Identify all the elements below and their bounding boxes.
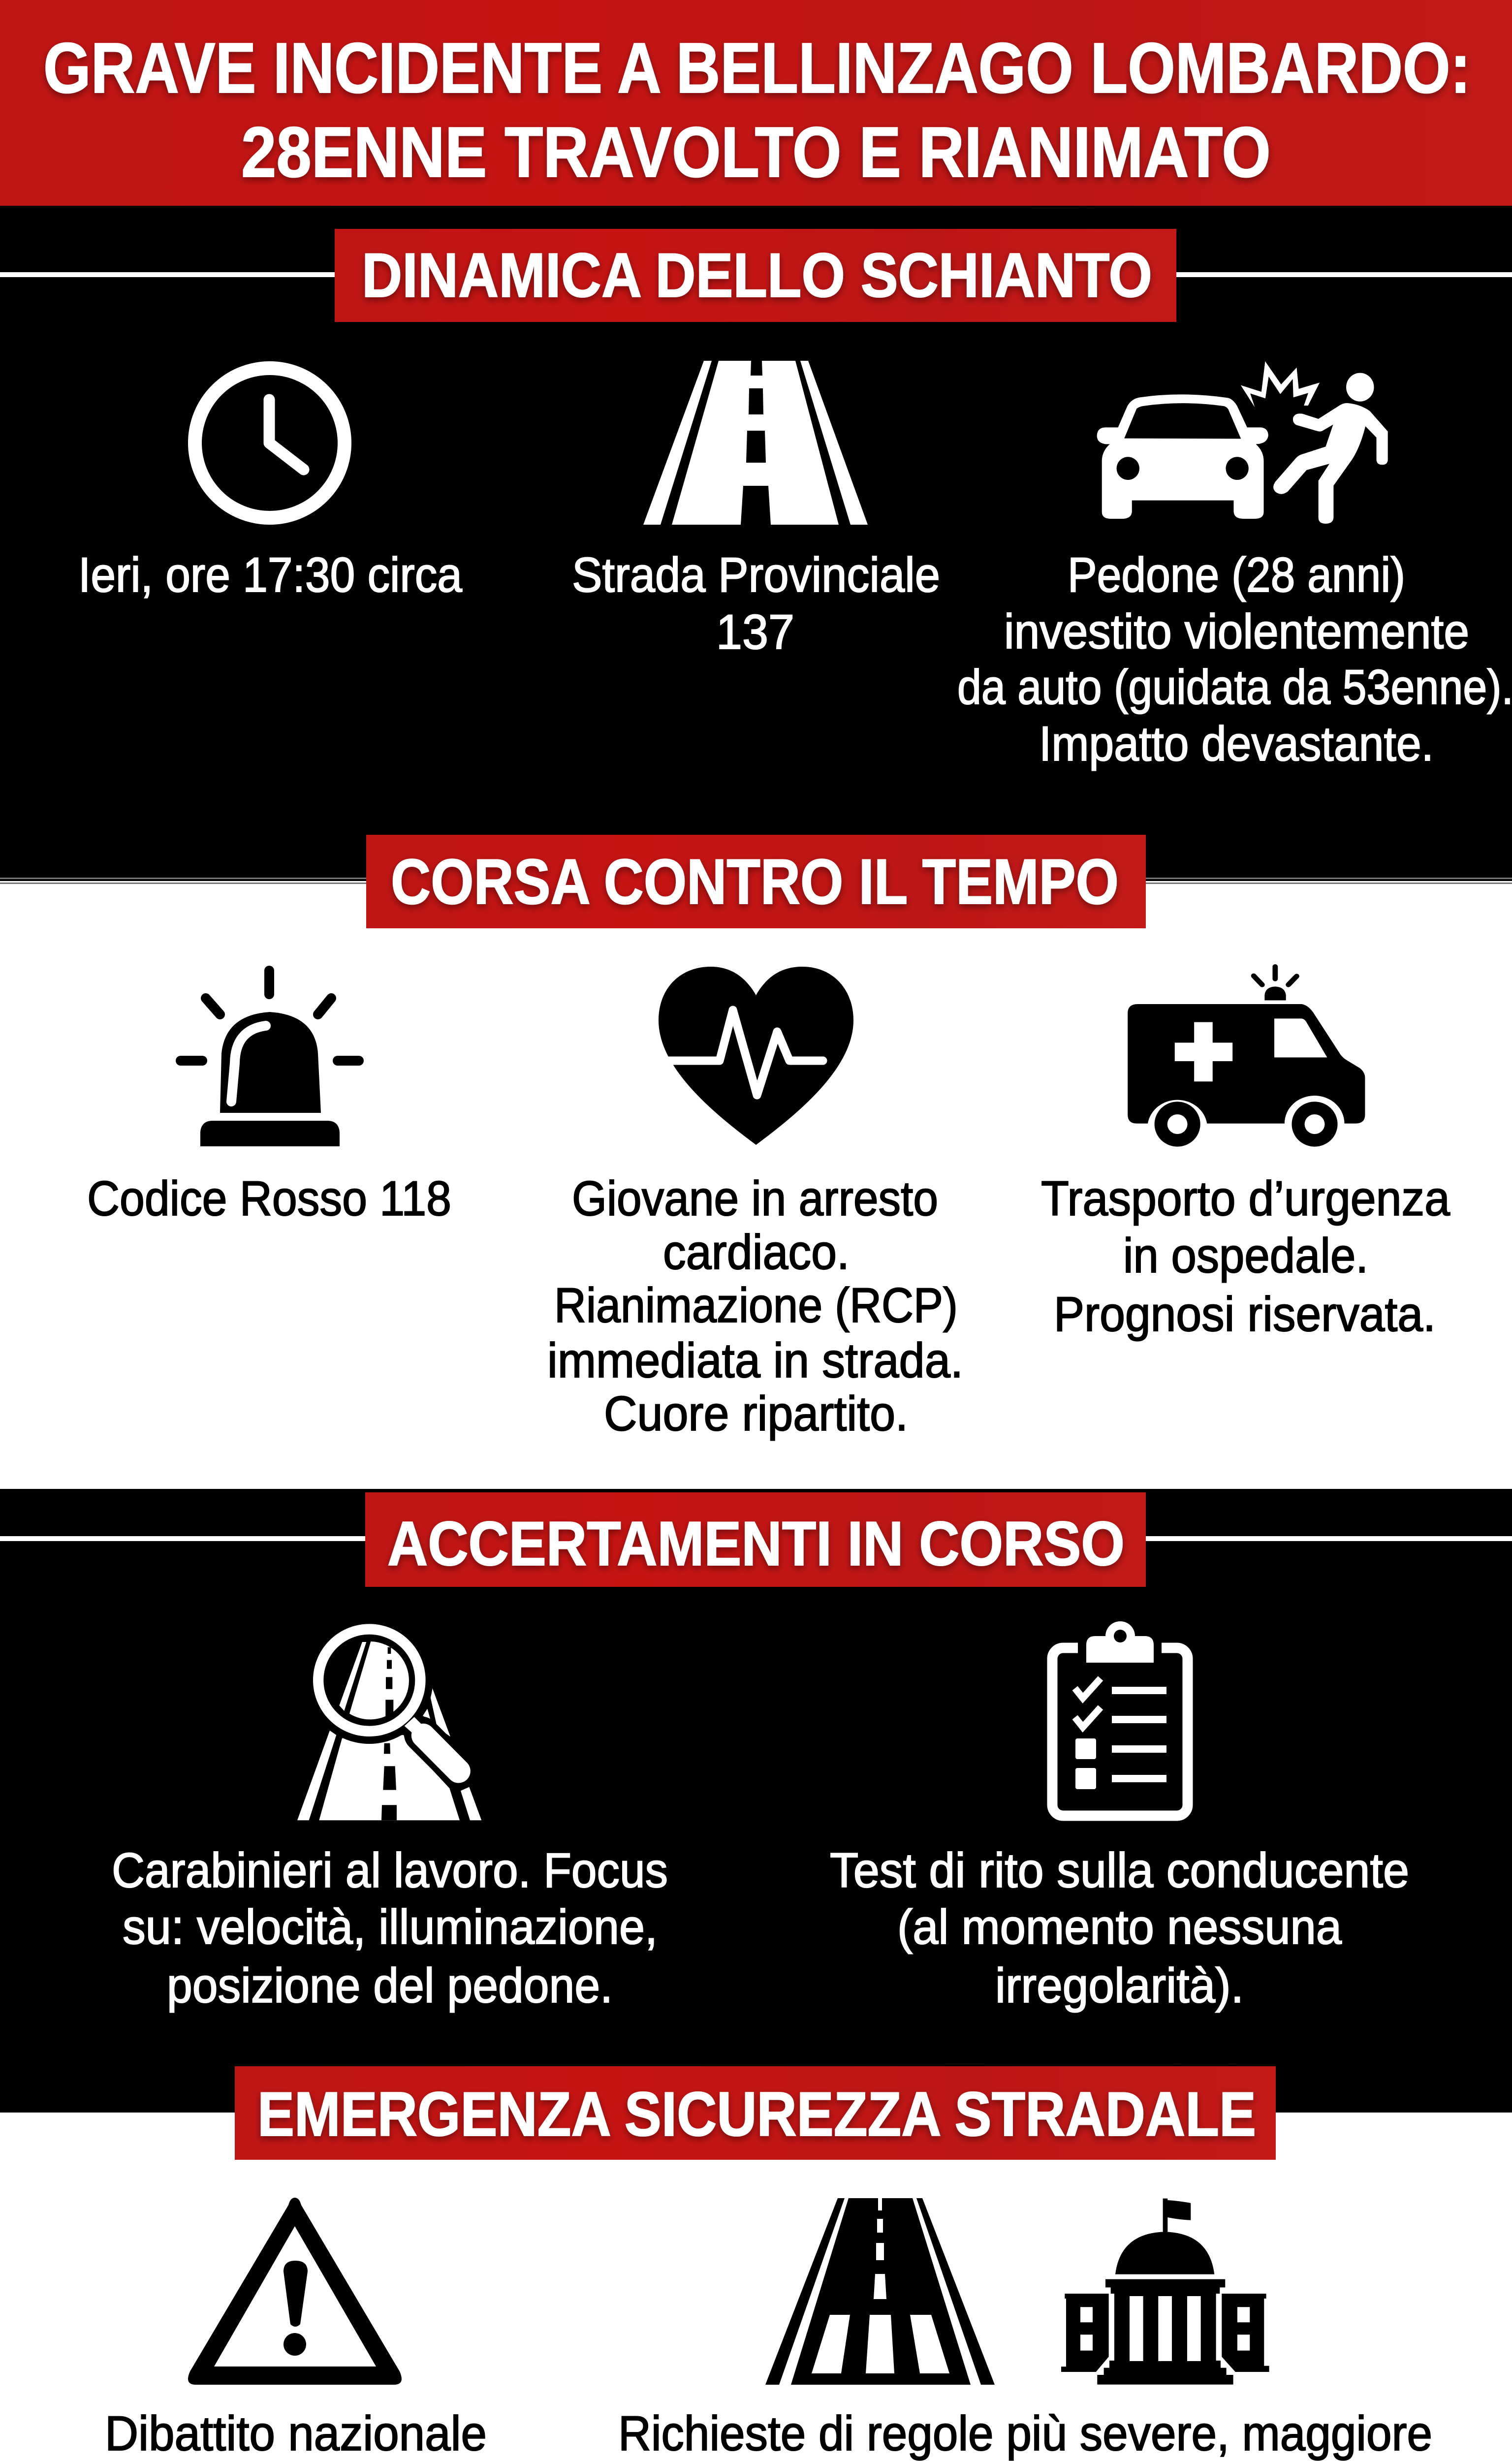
icon: ambulance <box>1128 967 1365 1147</box>
heading: accertamenti in corso <box>0 1492 1512 1587</box>
text: richieste: Richieste di regole più severe, maggiore <box>618 2406 1432 2461</box>
text: carabinieri: Carabinieri al lavoro. Focus <box>112 1843 668 1897</box>
text: pedone: investito violentemente <box>1004 604 1469 659</box>
text: test di rito: (al momento nessuna <box>897 1899 1342 1954</box>
icon: magnifier over road <box>297 1616 481 1820</box>
text: arresto cardiaco: cardiaco. <box>663 1225 850 1279</box>
text: strada <box>572 547 940 659</box>
icon: heart with ecg <box>659 967 853 1145</box>
text: arresto cardiaco <box>547 1171 963 1441</box>
text: arresto cardiaco: Cuore ripartito. <box>604 1386 908 1441</box>
text: pedone: Impatto devastante. <box>1039 716 1434 771</box>
title banner: 28ENNE TRAVOLTO E RIANIMATO <box>241 112 1271 192</box>
icon: siren <box>181 971 359 1146</box>
icon: warning triangle <box>188 2198 402 2385</box>
text: pedone: Pedone (28 anni) <box>1068 547 1405 602</box>
text: carabinieri: su: velocità, illuminazione, <box>123 1899 658 1954</box>
heading: dinamica dello schianto <box>0 229 1512 322</box>
text: trasporto: in ospedale. <box>1123 1228 1368 1283</box>
text: trasporto <box>1041 1171 1450 1341</box>
text: arresto cardiaco: Giovane in arresto <box>572 1171 938 1226</box>
text: test di rito: Test di rito sulla conducente <box>830 1843 1409 1897</box>
text: strada: 137 <box>716 604 794 659</box>
heading: emergenza sicurezza stradale <box>235 2066 1276 2160</box>
text: dibattito: Dibattito nazionale <box>105 2406 487 2461</box>
icon: government building <box>1061 2199 1269 2385</box>
heading: emergenza sicurezza stradale: EMERGENZA SICUREZZA STRADALE <box>257 2079 1256 2149</box>
text: arresto cardiaco: Rianimazione (RCP) <box>554 1278 958 1332</box>
text: codice rosso: Codice Rosso 118 <box>87 1171 451 1226</box>
heading: accertamenti in corso: ACCERTAMENTI IN CORSO <box>387 1509 1125 1578</box>
text: arresto cardiaco: immediata in strada. <box>547 1333 963 1388</box>
icon: clock <box>195 368 345 518</box>
text: carabinieri <box>112 1843 668 2013</box>
text: test di rito: irregolarità). <box>995 1958 1244 2013</box>
icon: road <box>643 361 868 525</box>
text: test di rito <box>830 1843 1409 2013</box>
title banner <box>0 0 1512 206</box>
text: orario: Ieri, ore 17:30 circa <box>78 547 463 602</box>
text: pedone <box>957 547 1512 771</box>
text: strada: Strada Provinciale <box>572 547 940 602</box>
icon: road with crosswalk <box>765 2198 995 2385</box>
heading: corsa contro il tempo <box>0 835 1512 928</box>
text: carabinieri: posizione del pedone. <box>167 1958 613 2013</box>
section black band <box>0 1489 1512 2113</box>
text: trasporto: Prognosi riservata. <box>1054 1287 1436 1341</box>
heading: dinamica dello schianto: DINAMICA DELLO SCHIANTO <box>362 240 1152 310</box>
icon: clipboard checklist <box>1052 1621 1188 1816</box>
heading: corsa contro il tempo: CORSA CONTRO IL TEMPO <box>391 846 1119 917</box>
icon: car hitting pedestrian <box>1097 361 1388 524</box>
text: trasporto: Trasporto d’urgenza <box>1041 1171 1450 1226</box>
